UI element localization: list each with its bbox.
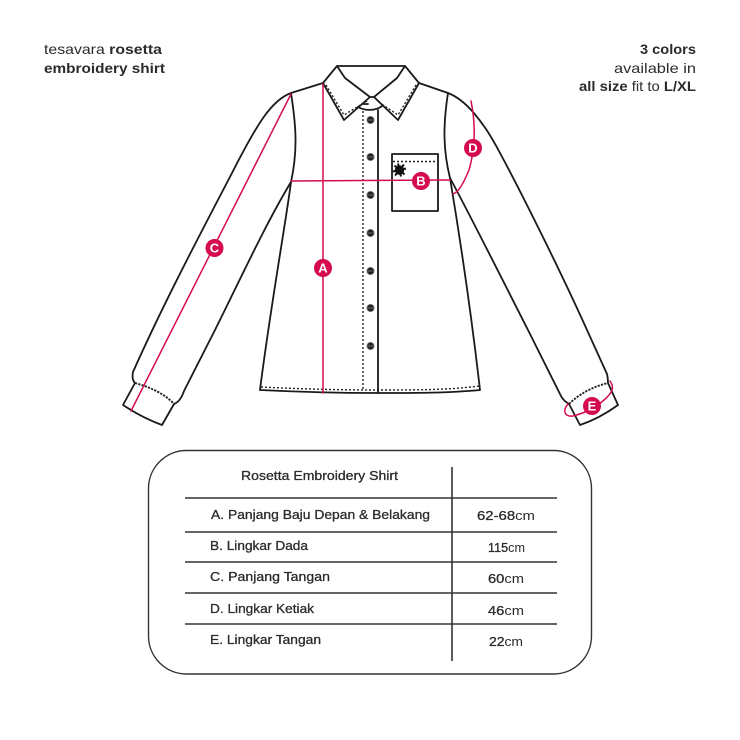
row D: D. Lingkar Ketiak — [210, 601, 315, 616]
measurement C: sleeve length — [131, 94, 291, 411]
row B — [210, 538, 525, 555]
row E — [210, 632, 523, 649]
row C: 60cm — [488, 571, 524, 586]
row C: C. Panjang Tangan — [210, 569, 330, 584]
measurement B: chest: B — [416, 174, 426, 188]
row D: 46cm — [488, 603, 524, 618]
row C — [210, 569, 524, 586]
row D — [210, 601, 524, 618]
placket — [377, 110, 379, 393]
hem stitching — [261, 386, 479, 390]
availability note — [579, 41, 696, 94]
measurement A: body length — [314, 84, 332, 393]
row B: B. Lingkar Dada — [210, 538, 309, 553]
shirt line drawing — [123, 66, 618, 425]
brand title: tesavara rosetta — [44, 41, 162, 57]
size table panel — [148, 450, 592, 674]
right sleeve — [419, 83, 608, 404]
left sleeve — [133, 83, 323, 404]
row A: A. Panjang Baju Depan & Belakang — [211, 507, 430, 522]
availability note: all size fit to L/XL — [579, 78, 696, 94]
icon: embroidered flower — [393, 164, 406, 176]
measurement D: armhole: D — [468, 140, 478, 156]
brand title: embroidery shirt — [44, 60, 165, 76]
table heading: Rosetta Embroidery Shirt — [241, 468, 398, 483]
row A: 62-68 cm — [477, 508, 535, 523]
right cuff — [569, 383, 618, 425]
row E: E. Lingkar Tangan — [210, 632, 321, 647]
measurement A: body length: A — [318, 260, 328, 276]
measurement E: cuff: E — [588, 398, 597, 414]
availability note: available in — [614, 60, 696, 76]
table grid — [185, 467, 557, 661]
row B: 115cm — [488, 540, 525, 555]
buttons — [367, 116, 374, 350]
measurement E: cuff — [565, 381, 612, 416]
measurement B: chest — [291, 172, 450, 190]
shirt body outline — [260, 178, 480, 393]
brand title — [44, 41, 165, 76]
row A — [211, 507, 535, 523]
row E: 22cm — [489, 634, 523, 649]
measurement C: sleeve length: C — [210, 240, 220, 256]
availability note: 3 colors — [640, 41, 696, 57]
collar — [323, 66, 419, 120]
measurement D: armhole — [453, 101, 482, 194]
collar stand and buttonhole — [358, 104, 382, 110]
pocket — [392, 154, 438, 211]
left cuff — [123, 383, 174, 425]
